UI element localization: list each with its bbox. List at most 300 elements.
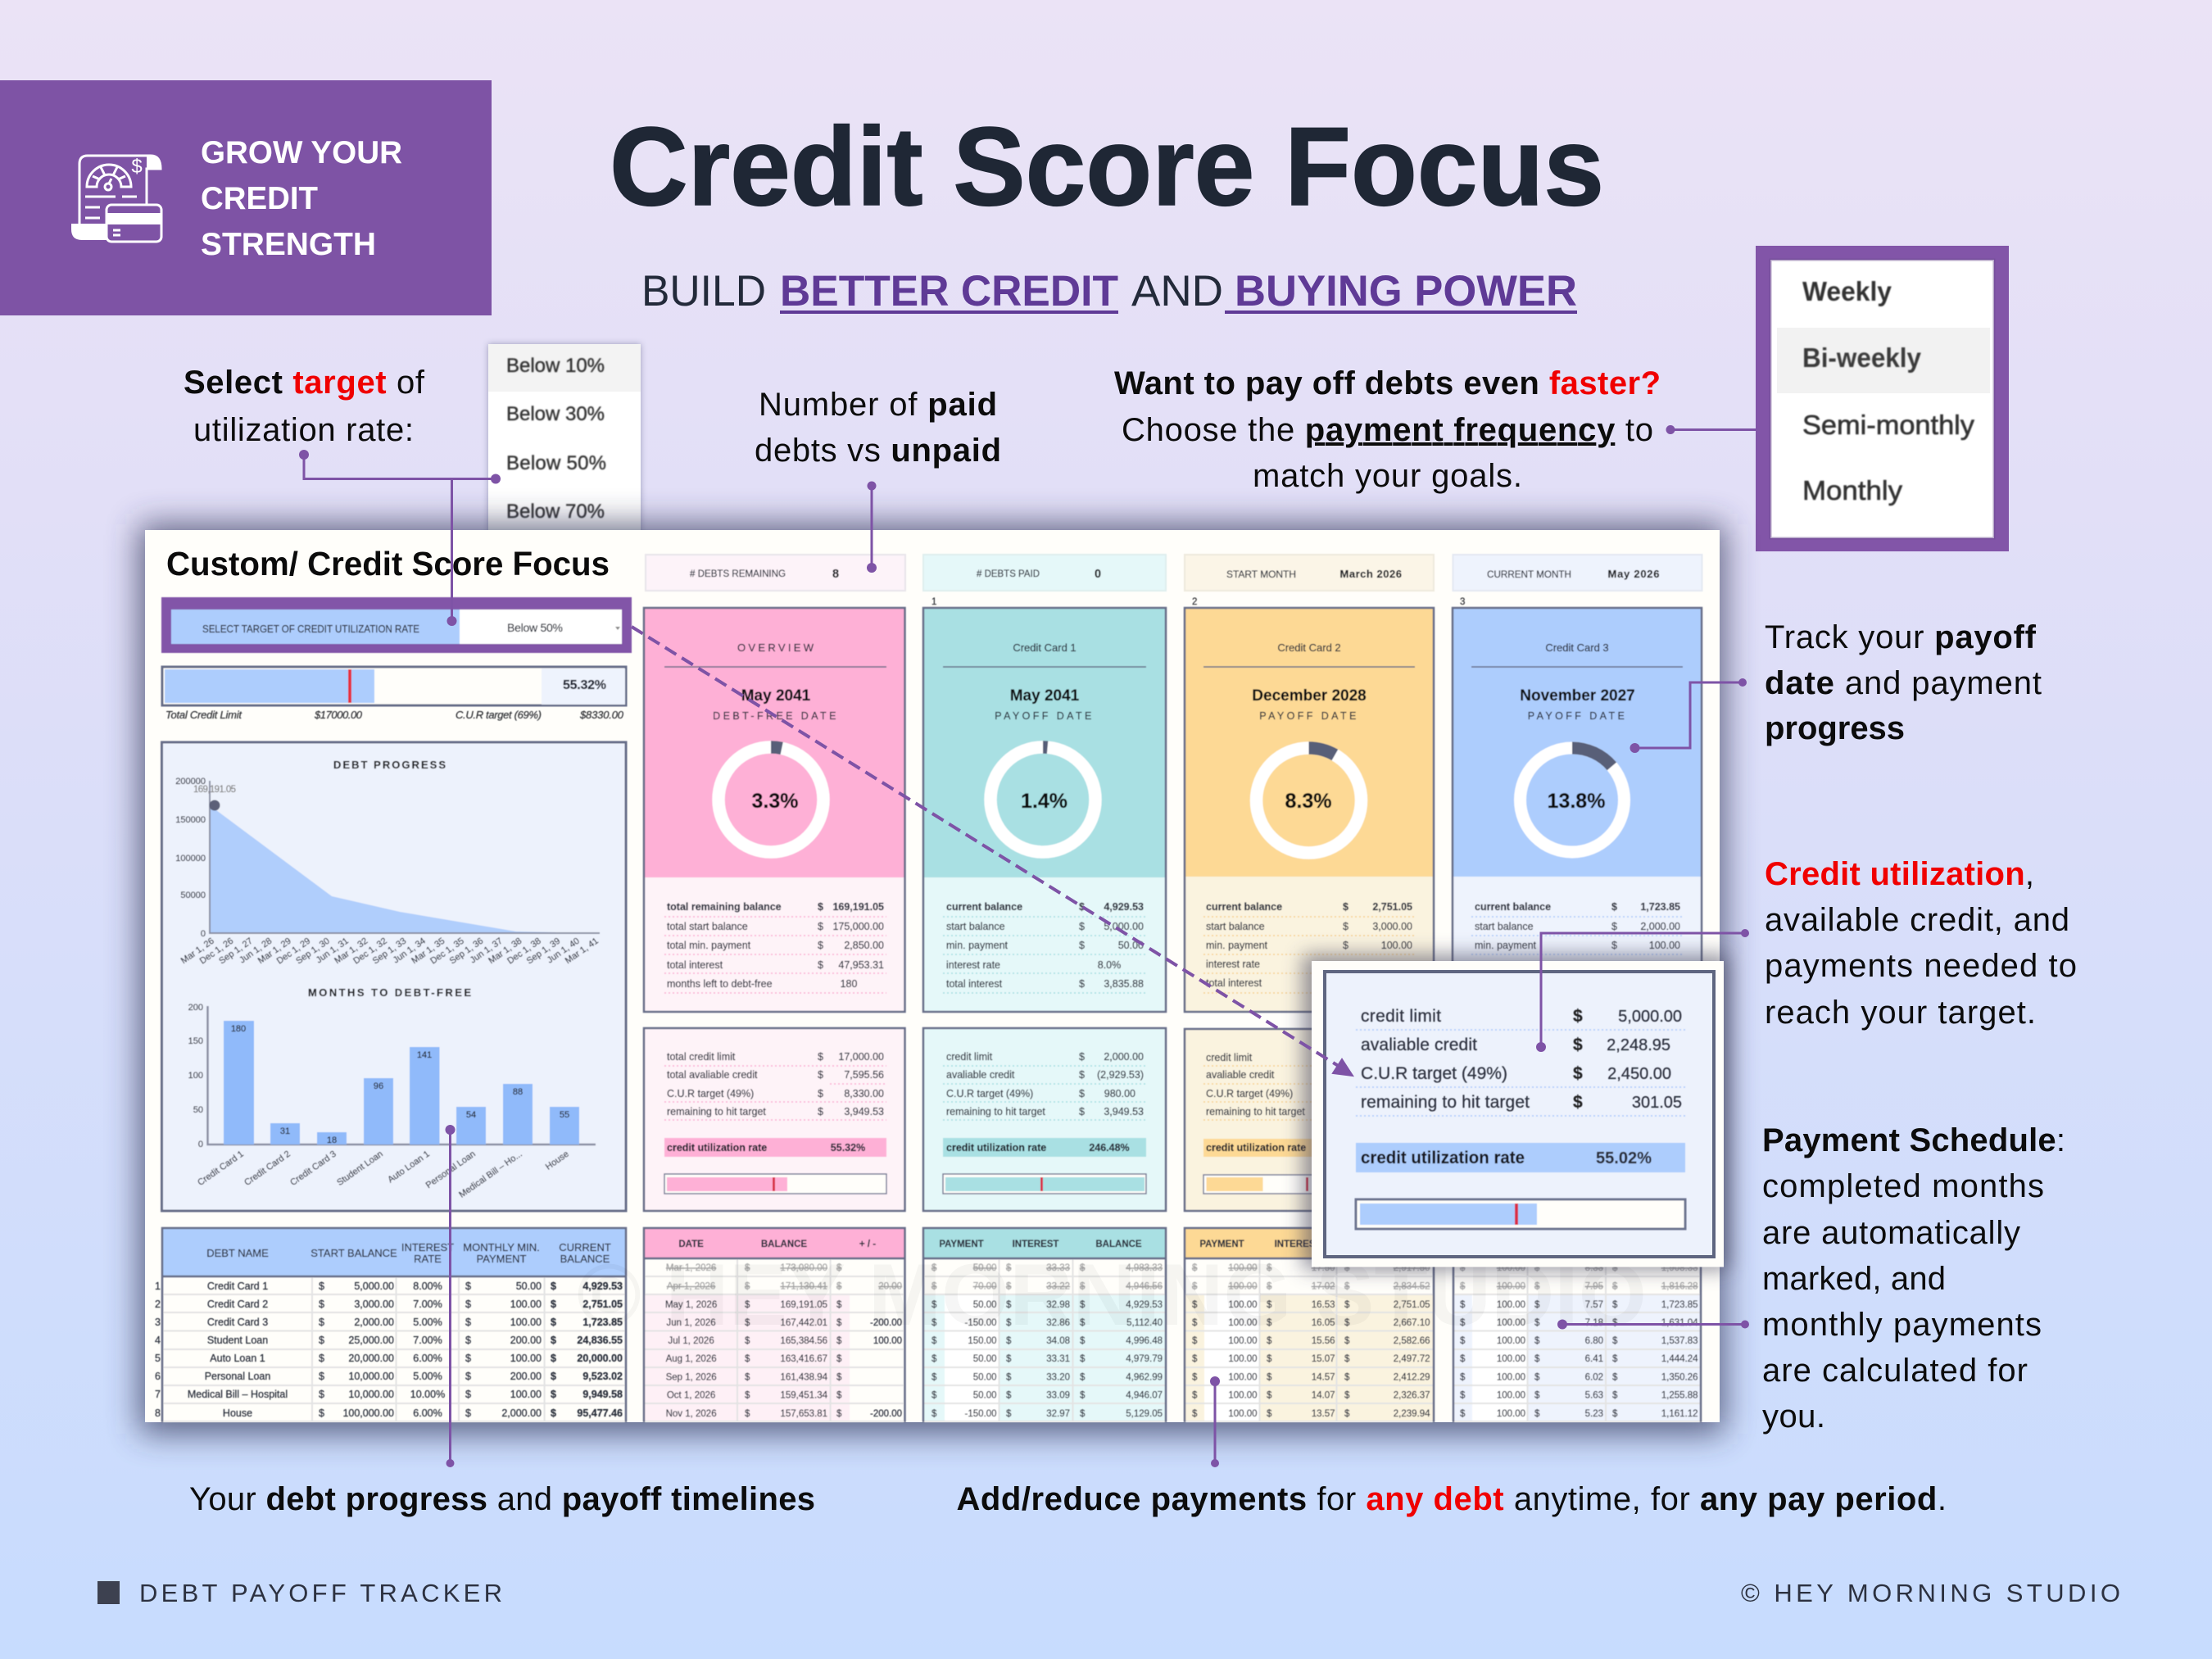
panel: credit card 1 utilization: avaliable credit [946, 1069, 1015, 1081]
debt progress area chart: 169,191.05 [193, 785, 236, 795]
table: debt list: $ [319, 1407, 324, 1419]
panel: spreadsheet screenshot [145, 530, 1720, 1422]
annotation: payment schedule: are automatically [1762, 1215, 2020, 1251]
annotation: paid vs unpaid: debts vs unpaid [755, 433, 1001, 469]
table: credit card 1 payment schedule: $ [1006, 1281, 1012, 1291]
table: credit card 1 payment schedule: $ [1080, 1300, 1086, 1310]
panel: credit card 2 utilization: credit utilization rate [1206, 1142, 1306, 1154]
table: credit card 2 payment schedule: $ [1344, 1300, 1350, 1310]
panel: credit card 2 [1185, 608, 1434, 1012]
credit card 1 figures: 5,000.00 [1104, 921, 1144, 932]
table: credit card 1 payment schedule: $ [1080, 1391, 1086, 1401]
table: credit card 2 payment schedule: $ [1267, 1300, 1272, 1310]
panel: credit card 3 [1453, 608, 1702, 1012]
column index numbers: 2 [1192, 597, 1197, 607]
table: credit card 1 payment schedule: 33.22 [1046, 1281, 1070, 1291]
table: overview payment schedule: $ [836, 1318, 842, 1328]
table: credit card 3 payment schedule: 7.18 [1585, 1318, 1603, 1328]
table: credit card 3 payment schedule: 1,350.26 [1661, 1373, 1698, 1383]
panel: zoomed credit card 3 utilization: credit limit [1361, 1007, 1441, 1026]
table: debt list: $ [465, 1335, 471, 1346]
table: credit card 1 payment schedule: $ [931, 1281, 937, 1291]
table: overview payment schedule: $ [745, 1281, 750, 1291]
connector: select target [299, 450, 501, 626]
panel: credit card 3: Credit Card 3 [1545, 641, 1609, 654]
overview figures: $ [818, 901, 823, 913]
annotation: payoff progress: Track your payoff [1765, 619, 2037, 655]
table: credit card 2 payment schedule: $ [1192, 1336, 1198, 1346]
months to debt-free bar chart: Medical Bill – Ho... [457, 1149, 524, 1200]
table: overview payment schedule: 159,451.34 [780, 1391, 828, 1401]
table: credit card 3 payment schedule: 1,255.88 [1661, 1391, 1698, 1401]
table: debt list: $ [551, 1371, 556, 1382]
table: credit card 2 payment schedule: $ [1344, 1336, 1350, 1346]
debt progress area chart: Jun 1, 37 [469, 936, 505, 965]
donut: 13.8%: 13.8% [1548, 790, 1605, 813]
table: debt list: $ [465, 1407, 471, 1419]
credit card 1 figures: start balance [946, 921, 1005, 932]
overall utilization bar [162, 667, 626, 705]
connector: payoff date [1630, 678, 1747, 753]
table: overview payment schedule: $ [836, 1373, 842, 1383]
debt progress area chart: 150000 [175, 815, 206, 825]
panel: payment frequency dropdown: Bi-weekly [1802, 342, 1922, 373]
table: overview payment schedule: $ [745, 1409, 750, 1419]
table: overview payment schedule: $ [836, 1391, 842, 1401]
annotation: select target: utilization rate: [193, 412, 414, 448]
table: debt list: 24,836.55 [577, 1335, 623, 1346]
table: debt list: 8.00% [413, 1281, 442, 1292]
table: credit card 1 payment schedule: $ [1080, 1263, 1086, 1273]
stat: debts remaining: # DEBTS REMAINING [690, 569, 786, 579]
table: credit card 1 payment schedule: 50.00 [973, 1300, 996, 1310]
column index numbers: 1 [931, 597, 936, 607]
table: overview payment schedule: $ [745, 1336, 750, 1346]
table: debt list: 100,000.00 [342, 1407, 394, 1419]
credit card 3 figures: min. payment [1475, 940, 1537, 951]
table: debt list: INTEREST [401, 1241, 454, 1253]
panel: credit card 1 utilization: 980.00 [1104, 1088, 1135, 1099]
table: debt list: 6 [155, 1371, 161, 1382]
table: overview payment schedule: -200.00 [870, 1409, 902, 1419]
panel: zoomed credit card 3 utilization: $ [1573, 1064, 1583, 1083]
annotation: credit utilization: Credit utilization, [1765, 856, 2034, 892]
table: debt list: 5.00% [413, 1371, 442, 1382]
table: credit card 2 payment schedule: 100.00 [1228, 1318, 1257, 1328]
table: debt list: 20,000.00 [348, 1353, 394, 1364]
annotation: payment schedule: are calculated for [1762, 1353, 2028, 1389]
annotation: payoff progress: progress [1765, 710, 1905, 746]
table: debt list: $ [319, 1371, 324, 1382]
months to debt-free bar chart: 0 [198, 1140, 203, 1149]
table: overview payment schedule: DATE [678, 1240, 704, 1249]
panel: zoomed credit card 3 utilization: $ [1573, 1036, 1583, 1054]
annotation: payment frequency [1114, 365, 1661, 494]
table: credit card 2 payment schedule: 2,582.66 [1394, 1336, 1430, 1346]
table: credit card 1 payment schedule: 4,996.48 [1126, 1336, 1163, 1346]
subtitle [641, 267, 1577, 315]
table: overview payment schedule: $ [836, 1354, 842, 1364]
subtitle: AND [1131, 267, 1223, 315]
table: credit card 3 payment schedule: $ [1534, 1409, 1540, 1419]
table: debt list: Credit Card 1 [207, 1281, 268, 1292]
utilization bar labels: $17000.00 [314, 709, 363, 721]
table: credit card 1 payment schedule: 150.00 [968, 1336, 996, 1346]
panel: credit card 1 utilization: $ [1079, 1051, 1085, 1063]
connector: payment schedule [1557, 1319, 1749, 1329]
table: credit card 2 payment schedule: $ [1267, 1391, 1272, 1401]
table: debt list: Credit Card 2 [207, 1299, 268, 1310]
donut: 1.4% [990, 747, 1095, 852]
table: credit card 2 payment schedule: $ [1192, 1391, 1198, 1401]
panel: overview credit utilization: $ [818, 1051, 823, 1063]
panel: credit card 2: December 2028 [1252, 687, 1367, 705]
utilization bar labels: Total Credit Limit [165, 709, 243, 721]
debt progress area chart: 50000 [180, 891, 206, 900]
credit card 1 figures [943, 901, 1146, 993]
table: debt list: 10.00% [410, 1389, 445, 1400]
panel: credit card 2 utilization: C.U.R target (49%) [1206, 1088, 1293, 1099]
overview figures: $ [818, 959, 823, 971]
debt progress area chart: Mar 1, 26 [179, 936, 216, 966]
table: overview payment schedule: Jul 1, 2026 [668, 1336, 714, 1346]
panel: credit card 1 utilization [923, 1028, 1166, 1211]
annotation: credit utilization: available credit, and [1765, 902, 2069, 938]
table: credit card 1 payment schedule: 4,962.99 [1126, 1373, 1163, 1383]
donut: 1.4%: 1.4% [1021, 790, 1067, 813]
credit card 3 figures: start balance [1475, 921, 1534, 932]
panel: overview [644, 608, 904, 1012]
table: credit card 1 payment schedule: $ [931, 1300, 937, 1310]
annotation: payment frequency: Choose the payment frequency to [1122, 412, 1653, 448]
months to debt-free bar chart: MONTHS TO DEBT-FREE [308, 986, 471, 999]
table: debt list: $ [551, 1407, 556, 1419]
target utilization selector: SELECT TARGET OF CREDIT UTILIZATION RATE [202, 623, 419, 635]
donut: 8.3%: 8.3% [1285, 790, 1331, 813]
table: debt list: Credit Card 3 [207, 1317, 268, 1328]
panel: zoomed credit card 3 utilization: C.U.R target (49%) [1361, 1064, 1507, 1083]
table: credit card 2 payment schedule: PAYMENT [1199, 1240, 1244, 1249]
table: credit card 2 payment schedule: 100.00 [1228, 1300, 1257, 1310]
annotation: credit utilization: reach your target. [1765, 995, 2036, 1031]
table: debt list: 100.00 [510, 1317, 542, 1328]
credit card 3 figures: 1,723.85 [1640, 901, 1680, 913]
utilization bar labels: C.U.R target (69%) [456, 709, 542, 721]
credit card 1 figures: current balance [946, 901, 1022, 913]
table: credit card 3 payment schedule: 100.00 [1497, 1263, 1525, 1273]
panel: overview credit utilization: 7,595.56 [844, 1069, 884, 1081]
table: credit card 3 payment schedule: 100.00 [1497, 1391, 1525, 1401]
debt progress area chart: Jun 1, 40 [546, 936, 582, 965]
connector: add or reduce payments [1210, 1376, 1220, 1467]
table: credit card 2 payment schedule: 2,497.72 [1394, 1354, 1430, 1364]
table: debt list: $ [319, 1299, 324, 1310]
panel: credit card 2 utilization: avaliable credit [1206, 1069, 1275, 1081]
table: credit card 2 payment schedule: 100.00 [1228, 1391, 1257, 1401]
donut: 3.3%: 3.3% [752, 790, 798, 813]
debt progress area chart: Dec 1, 32 [351, 936, 389, 966]
panel: credit card 2 utilization: remaining to hit target [1206, 1106, 1305, 1117]
table: credit card 3 payment schedule: 5.23 [1585, 1409, 1603, 1419]
table: debt list: 5 [155, 1353, 161, 1364]
table: credit card 2 payment schedule: 14.07 [1312, 1391, 1335, 1401]
table: credit card 3 payment schedule: $ [1460, 1409, 1466, 1419]
credit card 3 figures: 100.00 [1649, 940, 1680, 951]
table: credit card 3 payment schedule: $ [1460, 1281, 1466, 1291]
panel: overview credit utilization: 17,000.00 [838, 1051, 884, 1063]
annotation: payment frequency: match your goals. [1253, 458, 1522, 494]
table: credit card 2 payment schedule: 100.00 [1228, 1281, 1257, 1291]
debt progress area chart: Sep 1, 39 [525, 936, 562, 966]
table: overview payment schedule: Sep 1, 2026 [666, 1373, 717, 1383]
table: debt list: $ [465, 1299, 471, 1310]
panel: overview credit utilization [644, 1028, 904, 1211]
table: credit card 2 payment schedule: 13.57 [1312, 1409, 1335, 1419]
overview figures: $ [818, 940, 823, 951]
table: credit card 1 payment schedule: 4,983.33 [1126, 1263, 1163, 1273]
table: credit card 2 payment schedule: $ [1267, 1354, 1272, 1364]
table: overview payment schedule: Apr 1, 2026 [667, 1281, 715, 1291]
connector: debt progress [446, 1125, 456, 1467]
table: debt list: RATE [414, 1253, 442, 1265]
months to debt-free bar chart: 150 [188, 1036, 203, 1046]
months to debt-free bar chart: 200 [188, 1003, 203, 1013]
panel: zoomed credit card 3 utilization: 55.02% [1596, 1149, 1652, 1167]
table: overview payment schedule: $ [836, 1300, 842, 1310]
panel: overview credit utilization: $ [818, 1069, 823, 1081]
table: credit card 1 payment schedule: 5,129.05 [1126, 1409, 1163, 1419]
table: credit card 2 payment schedule: $ [1344, 1409, 1350, 1419]
table: credit card 1 payment schedule: 70.00 [973, 1281, 996, 1291]
table: credit card 2 payment schedule [1185, 1228, 1434, 1422]
table: debt list: 7.00% [413, 1335, 442, 1346]
table: overview payment schedule: 165,384.56 [780, 1336, 827, 1346]
table: credit card 3 payment schedule: 1,161.12 [1661, 1409, 1698, 1419]
footer: product name: DEBT PAYOFF TRACKER [139, 1579, 502, 1607]
debt progress area chart [175, 759, 601, 966]
stat: debts remaining [646, 555, 905, 591]
table: credit card 3 payment schedule: $ [1534, 1281, 1540, 1291]
table: credit card 2 payment schedule: $ [1267, 1409, 1272, 1419]
debt progress area chart: Sep 1, 33 [371, 936, 408, 966]
dropdown: target rate options [488, 344, 641, 533]
table: debt list: 7 [155, 1389, 161, 1400]
table: debt list: DEBT NAME [206, 1247, 269, 1259]
table: credit card 1 payment schedule: 32.86 [1046, 1318, 1070, 1328]
months to debt-free bar chart: 54 [466, 1110, 476, 1120]
table: debt list: Student Loan [207, 1335, 268, 1346]
table: credit card 2 payment schedule: 2,834.52 [1394, 1281, 1430, 1291]
panel: credit card 1 utilization: (2,929.53) [1097, 1069, 1144, 1081]
table: credit card 1 payment schedule: $ [931, 1391, 937, 1401]
panel: credit card 1 utilization: 246.48% [1089, 1142, 1130, 1154]
debt progress area chart: Mar 1, 29 [256, 936, 293, 966]
utilization bar labels [165, 709, 624, 721]
table: overview payment schedule: BALANCE [761, 1240, 807, 1249]
annotation: payoff progress [1765, 619, 2042, 746]
table: debt list: 5,000.00 [354, 1281, 394, 1292]
table: credit card 2 payment schedule: 16.53 [1312, 1300, 1335, 1310]
overview figures: 47,953.31 [838, 959, 884, 971]
table: debt list: $ [551, 1317, 556, 1328]
table: debt list: 3 [155, 1317, 161, 1328]
annotation: credit utilization: payments needed to [1765, 948, 2077, 984]
table: debt list: $ [319, 1335, 324, 1346]
table: debt list: 9,949.58 [582, 1389, 623, 1400]
icon: credit report with gauge and card: $ [131, 156, 143, 178]
table: credit card 3 payment schedule: $ [1460, 1354, 1466, 1364]
panel: overview credit utilization: C.U.R target (49%) [667, 1088, 754, 1099]
panel: credit card 1: May 2041 [1010, 687, 1080, 705]
table: credit card 3 payment schedule: 6.41 [1585, 1354, 1603, 1364]
connector: debts paid [867, 482, 877, 573]
debt progress area chart: Dec 1, 35 [428, 936, 466, 966]
subtitle: BUILD [641, 267, 766, 315]
debt progress area chart: 200000 [175, 777, 206, 786]
debt progress area chart: 0 [201, 929, 206, 939]
credit card 1 figures: total interest [946, 978, 1003, 990]
table: credit card 3 payment schedule: $ [1612, 1281, 1618, 1291]
panel: credit card 1 utilization: 2,000.00 [1104, 1051, 1144, 1063]
table: debt list: 2,751.05 [582, 1299, 623, 1310]
panel: overview credit utilization: $ [818, 1088, 823, 1099]
table: credit card 2 payment schedule: $ [1267, 1373, 1272, 1383]
stat: debts remaining: 8 [832, 568, 839, 581]
overview figures: 180 [841, 978, 857, 990]
panel: zoomed credit card 3 utilization: remaining to hit target [1361, 1093, 1530, 1112]
donut: 13.8% [1521, 748, 1624, 852]
table: credit card 1 payment schedule: $ [1006, 1318, 1012, 1328]
table: credit card 2 payment schedule: $ [1267, 1318, 1272, 1328]
overview figures: 2,850.00 [844, 940, 884, 951]
table: debt list: 95,477.46 [577, 1407, 623, 1419]
panel: zoomed credit card 3 utilization [1312, 961, 1724, 1267]
table: credit card 3 payment schedule: $ [1534, 1263, 1540, 1273]
annotation: payment schedule: you. [1762, 1398, 1825, 1435]
table: credit card 3 payment schedule: $ [1460, 1336, 1466, 1346]
table: overview payment schedule: 171,130.41 [780, 1281, 827, 1291]
credit card 1 figures: 8.0% [1098, 959, 1121, 971]
panel: zoomed credit card 3 utilization: 2,248.95 [1607, 1036, 1670, 1054]
table: debt list: 6.00% [413, 1353, 442, 1364]
table: credit card 2 payment schedule: 2,667.10 [1394, 1318, 1430, 1328]
table: credit card 3 payment schedule: $ [1612, 1263, 1618, 1273]
table: debt list: 2 [155, 1299, 161, 1310]
panel: overview credit utilization: 8,330.00 [844, 1088, 884, 1099]
table: credit card 2 payment schedule: $ [1192, 1318, 1198, 1328]
annotation: select target: Select target of [184, 365, 425, 401]
table: debt list: $ [465, 1389, 471, 1400]
table: debt list: 2,000.00 [501, 1407, 542, 1419]
table: debt list: PAYMENT [477, 1253, 527, 1265]
table: credit card 1 payment schedule: 4,946.07 [1126, 1391, 1163, 1401]
table: credit card 2 payment schedule: $ [1192, 1281, 1198, 1291]
table: overview payment schedule: -200.00 [870, 1318, 902, 1328]
debt progress area chart: Mar 1, 32 [333, 936, 369, 966]
dropdown: target rate options: Below 10% [506, 355, 605, 377]
table: debt list: $ [319, 1281, 324, 1292]
stat: start month [1185, 555, 1434, 591]
table: credit card 1 payment schedule: 5,112.40 [1126, 1318, 1163, 1328]
table: debt list: $ [551, 1299, 556, 1310]
table: credit card 3 payment schedule: 100.00 [1497, 1409, 1525, 1419]
table: credit card 3 payment schedule: $ [1460, 1318, 1466, 1328]
months to debt-free bar chart: 18 [327, 1135, 337, 1145]
table: credit card 1 payment schedule: $ [1006, 1336, 1012, 1346]
credit card 2 figures: start balance [1206, 921, 1265, 932]
months to debt-free bar chart: Auto Loan 1 [386, 1149, 432, 1185]
table: credit card 1 payment schedule: 4,979.79 [1126, 1354, 1163, 1364]
table: credit card 1 payment schedule: $ [1080, 1281, 1086, 1291]
table: overview payment schedule: 173,080.00 [780, 1263, 827, 1273]
table: debt list: 5.00% [413, 1317, 442, 1328]
panel: zoomed credit card 3 utilization: 5,000.00 [1618, 1008, 1682, 1026]
table: debt list: BALANCE [560, 1253, 610, 1265]
panel: zoomed credit card 3 utilization: $ [1573, 1007, 1583, 1026]
table: credit card 1 payment schedule: -150.00 [964, 1409, 996, 1419]
table: overview payment schedule: Nov 1, 2026 [666, 1409, 717, 1419]
panel: credit card 3: PAYOFF DATE [1528, 710, 1627, 722]
table: credit card 2 payment schedule: 2,917.50 [1394, 1263, 1430, 1273]
stat: current month [1453, 555, 1702, 591]
table: debt list: 3,000.00 [354, 1299, 394, 1310]
table: credit card 3 payment schedule: 100.00 [1497, 1336, 1525, 1346]
table: overview payment schedule: $ [836, 1263, 842, 1273]
table: credit card 2 payment schedule: $ [1344, 1373, 1350, 1383]
panel: credit card 1 utilization: credit limit [946, 1051, 993, 1063]
credit card 3 figures: 2,000.00 [1640, 921, 1680, 932]
panel: credit card 1 utilization: 3,949.53 [1104, 1106, 1144, 1117]
stat: debts paid: # DEBTS PAID [977, 569, 1040, 579]
panel: credit card 1 [923, 608, 1166, 1012]
table: credit card 3 payment schedule: 7.95 [1585, 1281, 1603, 1291]
table: overview payment schedule: Oct 1, 2026 [667, 1391, 715, 1401]
connector: payment frequency [1666, 425, 1756, 434]
panel: overview credit utilization: total avaliable credit [667, 1069, 758, 1081]
table: debt list: MONTHLY MIN. [463, 1241, 540, 1253]
credit card 3 figures: $ [1611, 901, 1617, 913]
table: credit card 3 payment schedule: 8.33 [1585, 1263, 1603, 1273]
table: debt list: $ [319, 1353, 324, 1364]
table: credit card 3 payment schedule: 100.00 [1497, 1318, 1525, 1328]
table: debt list: 4 [155, 1335, 161, 1346]
panel: credit card 1: PAYOFF DATE [995, 710, 1095, 722]
table: credit card 1 payment schedule: $ [1080, 1336, 1086, 1346]
panel: overview credit utilization: remaining to hit target [667, 1106, 766, 1117]
table: debt list: 200.00 [510, 1371, 542, 1382]
table: credit card 3 payment schedule: 100.00 [1497, 1300, 1525, 1310]
table: credit card 3 payment schedule: $ [1534, 1300, 1540, 1310]
table: debt list: $ [319, 1389, 324, 1400]
table: credit card 3 payment schedule: 100.00 [1497, 1373, 1525, 1383]
table: debt list: 1 [155, 1281, 161, 1292]
table: debt list: $ [551, 1389, 556, 1400]
months to debt-free bar chart: Student Loan [335, 1149, 385, 1188]
credit card 1 figures: interest rate [946, 959, 1000, 971]
annotation: payment schedule: completed months [1762, 1168, 2044, 1204]
table: credit card 3 payment schedule: 1,723.85 [1661, 1300, 1698, 1310]
donut: 8.3% [1257, 748, 1362, 853]
callout shadow [1303, 954, 1729, 1270]
panel: overview: May 2041 [741, 687, 811, 705]
table: overview payment schedule: 169,191.05 [780, 1300, 827, 1310]
table: credit card 3 payment schedule: $ [1534, 1373, 1540, 1383]
table: overview payment schedule: 167,442.01 [780, 1318, 827, 1328]
table: credit card 2 payment schedule: $ [1267, 1263, 1272, 1273]
credit card 2 figures: 3,000.00 [1372, 921, 1412, 932]
credit card 1 figures: 3,835.88 [1104, 978, 1144, 990]
stat: start month: START MONTH [1226, 569, 1296, 580]
